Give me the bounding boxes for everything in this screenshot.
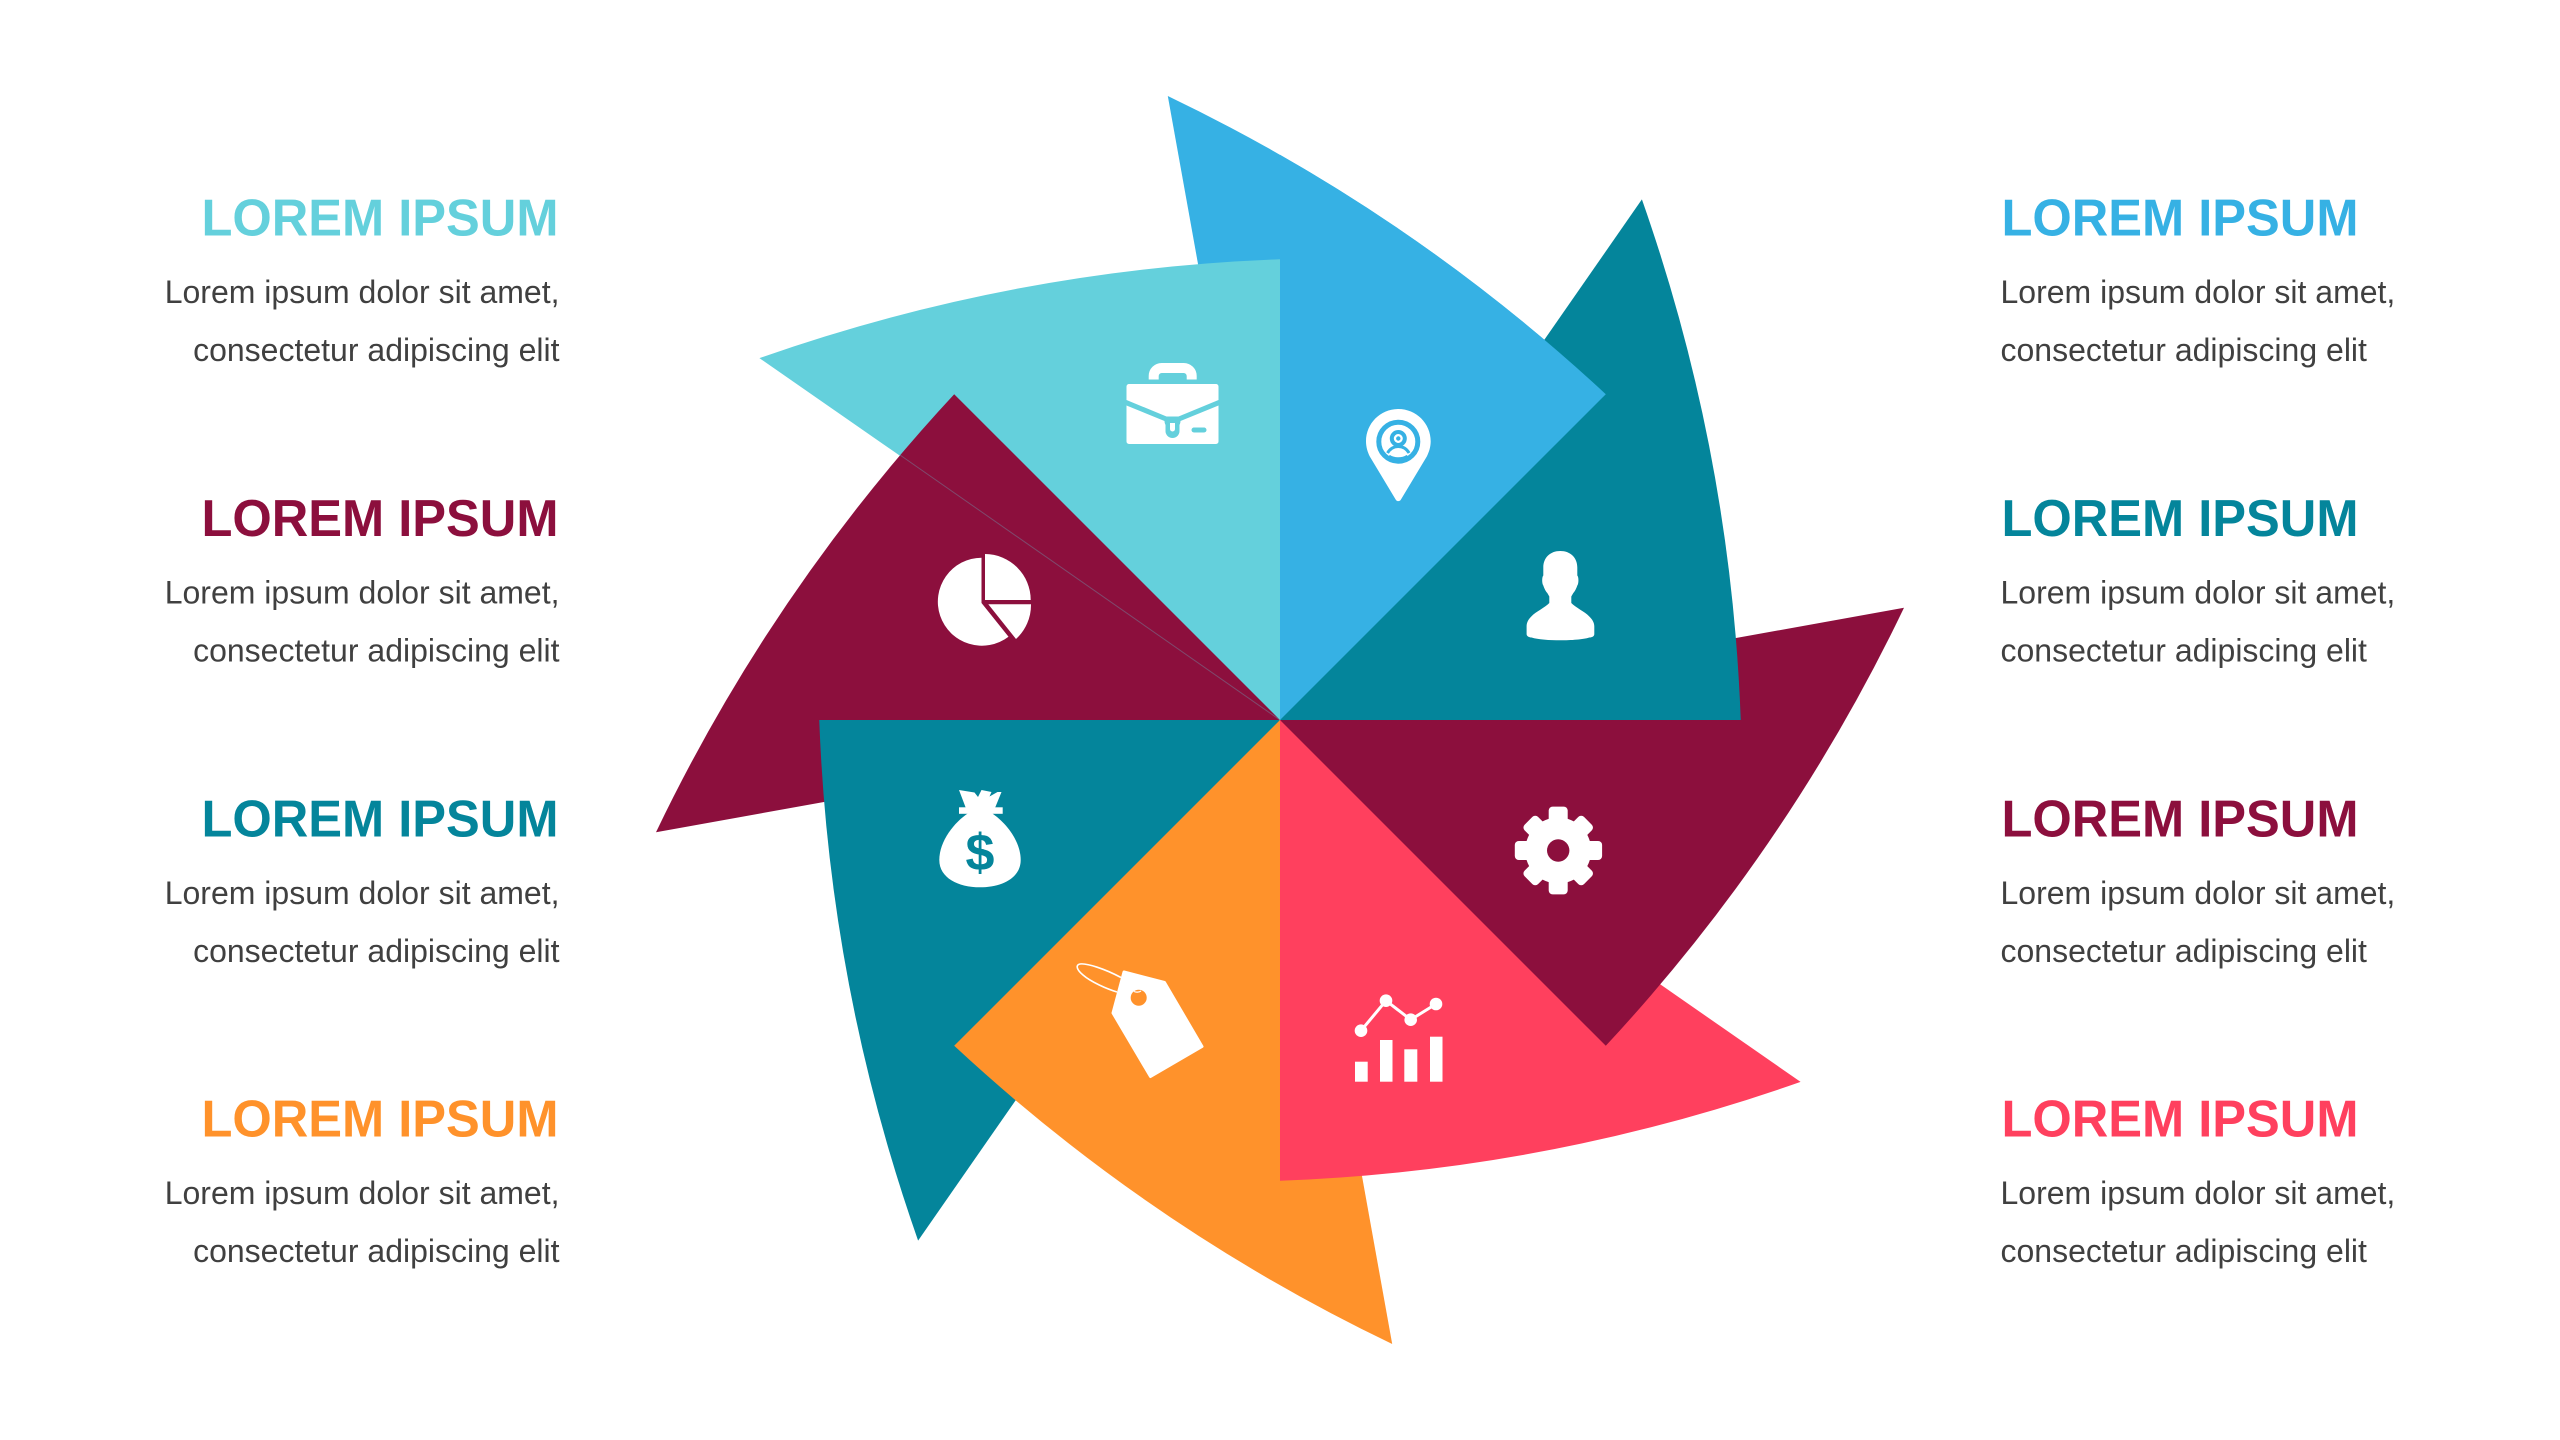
icon: money bag: $ xyxy=(966,824,995,882)
blade: dark red left xyxy=(656,394,1280,832)
text block: right 1: consectetur adipiscing elit xyxy=(2000,332,2367,368)
text block: left 4: LOREM IPSUM xyxy=(202,1091,558,1149)
text block: right 4: consectetur adipiscing elit xyxy=(2000,1233,2367,1269)
icon: location pin xyxy=(1366,409,1431,501)
text block: right 2: Lorem ipsum dolor sit amet, xyxy=(2000,574,2395,610)
text block: right 1: LOREM IPSUM xyxy=(2002,190,2358,248)
icon: money bag xyxy=(939,790,1021,887)
text block: left 2: LOREM IPSUM xyxy=(202,490,558,548)
icon: briefcase xyxy=(1126,368,1218,444)
blade: dark red right xyxy=(1280,608,1904,1046)
blade: blue (body, overlaps teal right) xyxy=(1280,154,1606,720)
blade: pink xyxy=(1050,641,1801,1392)
icon: person silhouette xyxy=(1527,551,1594,640)
text block: right 2 xyxy=(2000,490,2395,668)
text block: left 1: LOREM IPSUM xyxy=(202,190,558,248)
text block: left 2: consectetur adipiscing elit xyxy=(193,632,560,668)
text block: right 1 xyxy=(2000,190,2395,368)
blade: teal left xyxy=(608,490,1359,1241)
text block: right 3 xyxy=(2000,790,2395,969)
pinwheel chart xyxy=(656,96,1904,1344)
blade: orange xyxy=(954,720,1392,1344)
blade: teal right xyxy=(1201,199,1952,950)
icon: gear xyxy=(1515,807,1602,894)
text block: left 1: Lorem ipsum dolor sit amet, xyxy=(165,274,560,310)
text block: left 2: Lorem ipsum dolor sit amet, xyxy=(165,574,560,610)
icon: price tag xyxy=(1077,964,1202,1076)
text block: left 4 xyxy=(165,1091,560,1269)
text block: right 2: LOREM IPSUM xyxy=(2002,490,2358,548)
text block: left 3 xyxy=(165,790,560,969)
text block: right 1: Lorem ipsum dolor sit amet, xyxy=(2000,274,2395,310)
text block: left 1: consectetur adipiscing elit xyxy=(193,332,560,368)
text block: right 2: consectetur adipiscing elit xyxy=(2000,632,2367,668)
text block: left 4: Lorem ipsum dolor sit amet, xyxy=(165,1175,560,1211)
text block: right 4: Lorem ipsum dolor sit amet, xyxy=(2000,1175,2395,1211)
text block: right 3: consectetur adipiscing elit xyxy=(2000,933,2367,969)
text block: left 1 xyxy=(165,190,560,368)
text block: left 2 xyxy=(165,490,560,668)
text block: right 3: LOREM IPSUM xyxy=(2002,790,2358,848)
icon: bar and line chart xyxy=(1355,994,1442,1082)
icon: pie chart xyxy=(938,554,1031,646)
text block: left 3: Lorem ipsum dolor sit amet, xyxy=(165,875,560,911)
blade: blue (tip, lies beneath light teal) xyxy=(1168,96,1606,720)
text block: left 4: consectetur adipiscing elit xyxy=(193,1233,560,1269)
text block: right 4 xyxy=(2000,1091,2395,1269)
text block: right 4: LOREM IPSUM xyxy=(2002,1091,2358,1149)
text block: right 3: Lorem ipsum dolor sit amet, xyxy=(2000,875,2395,911)
blade: light teal xyxy=(759,48,1510,799)
text block: left 3: consectetur adipiscing elit xyxy=(193,933,560,969)
text block: left 3: LOREM IPSUM xyxy=(202,790,558,848)
